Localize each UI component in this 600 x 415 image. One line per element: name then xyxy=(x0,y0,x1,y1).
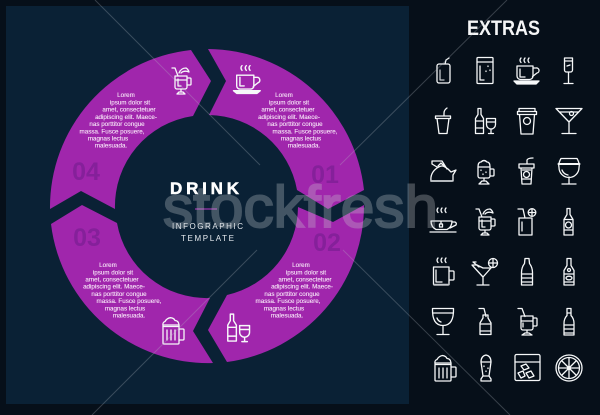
number 02: 02 xyxy=(313,229,341,257)
text block 03 xyxy=(83,262,162,320)
icon: wine glass xyxy=(432,308,454,334)
center title: DRINK: DRINK xyxy=(170,179,240,198)
icon: glass mug with straw xyxy=(518,308,537,335)
text block 01: adipiscing elit. Maece- xyxy=(258,114,320,121)
subtitle: TEMPLATE xyxy=(181,234,234,243)
icon: labelled bottle xyxy=(564,258,574,285)
icon: tea cup xyxy=(430,208,456,232)
icon: tall glass with citrus xyxy=(518,209,536,235)
icon: cup with straw xyxy=(436,108,450,134)
text block 02: malesuada. xyxy=(271,312,303,320)
icon: water glass xyxy=(477,58,493,84)
panel: segment 01 xyxy=(208,49,364,209)
text block 04: nas porttitor congue xyxy=(89,121,145,128)
text block 01: malesuada. xyxy=(288,143,320,150)
panel: segment 03 xyxy=(51,205,213,363)
icon: beer bottle xyxy=(564,208,573,235)
panel: segment 04 xyxy=(50,50,211,209)
icon: cocktail with citrus xyxy=(472,258,498,285)
text block 02: adipiscing elit. Maece- xyxy=(271,284,333,291)
title accent line xyxy=(195,208,217,210)
icon: wine goblet xyxy=(558,158,580,184)
icon: bottle with straw xyxy=(479,308,491,334)
text block 03: magnas lectus xyxy=(105,305,145,312)
subtitle: INFOGRAPHIC xyxy=(172,222,243,231)
text block 01: amet, consectetuer xyxy=(261,107,315,114)
icon: martini xyxy=(556,108,582,134)
number 04: 04 xyxy=(72,158,100,186)
icon: cocktail mug xyxy=(172,68,191,94)
icon: lidded cup with straw xyxy=(519,158,534,184)
watermark text: stockfresh xyxy=(163,175,438,240)
number 01: 01 xyxy=(311,161,339,189)
text block 04: massa. Fusce posuere, xyxy=(80,128,145,135)
text block 02: Lorem xyxy=(292,262,310,269)
icon: bottle and wine glass xyxy=(228,314,250,342)
watermark diagonal lines xyxy=(92,0,510,415)
text block 04: Lorem xyxy=(117,92,135,99)
text block 03: massa. Fusce posuere, xyxy=(97,298,162,305)
text block 03: ipsum dolor sit xyxy=(93,269,133,276)
text block 01: nas porttitor congue xyxy=(267,121,323,128)
text block 02 xyxy=(256,262,333,320)
icon: citrus slice xyxy=(556,355,582,381)
panel: segment 02 xyxy=(208,205,364,362)
text block 02: nas porttitor congue xyxy=(264,291,320,298)
text block 03: malesuada. xyxy=(113,312,145,320)
text block 01: massa. Fusce posuere, xyxy=(273,128,338,135)
text block 01: Lorem xyxy=(275,92,293,99)
icon: beer mug xyxy=(163,318,184,344)
text block 01: ipsum dolor sit xyxy=(269,100,309,106)
text block 03: Lorem xyxy=(99,262,117,269)
icon: mug cocktail xyxy=(476,209,495,235)
text block 04 xyxy=(80,92,157,150)
icon: beer mug large xyxy=(435,356,456,381)
text block 03: adipiscing elit. Maece- xyxy=(83,284,145,291)
text block 04: amet, consectetuer xyxy=(102,107,156,114)
text block 02: amet, consectetuer xyxy=(278,276,332,284)
icon: bottle and glass xyxy=(476,108,496,134)
icon: takeaway coffee xyxy=(518,108,536,134)
icon: champagne flute xyxy=(564,58,573,84)
icon: soda bottle xyxy=(522,258,532,285)
icon: coffee cup xyxy=(234,66,260,93)
text block 02: magnas lectus xyxy=(264,305,304,312)
subtitle xyxy=(172,222,243,243)
icon: tall beer glass xyxy=(481,355,491,381)
heading: extras: EXTRAS xyxy=(467,16,540,40)
icon: kettle xyxy=(431,161,456,181)
text block 02: ipsum dolor sit xyxy=(286,269,326,276)
icon: whisky with ice xyxy=(515,354,540,380)
main panel background xyxy=(6,6,409,404)
icon: soda can xyxy=(437,58,450,83)
icon: champagne bottle xyxy=(564,308,574,335)
text block 01 xyxy=(258,92,338,150)
text block 02: massa. Fusce posuere, xyxy=(256,298,321,305)
number 03: 03 xyxy=(73,224,101,252)
text block 03: nas porttitor congue xyxy=(91,291,147,298)
icon: coffee cup and saucer xyxy=(514,58,539,84)
text block 04: adipiscing elit. Maece- xyxy=(95,114,157,121)
icon: mug xyxy=(434,258,454,285)
text block 04: magnas lectus xyxy=(88,136,128,142)
text block 01: magnas lectus xyxy=(281,136,321,142)
icon: irish coffee xyxy=(478,160,494,184)
text block 04: ipsum dolor sit xyxy=(110,100,150,106)
text block 04: malesuada. xyxy=(95,143,127,150)
text block 03: amet, consectetuer xyxy=(85,276,139,284)
